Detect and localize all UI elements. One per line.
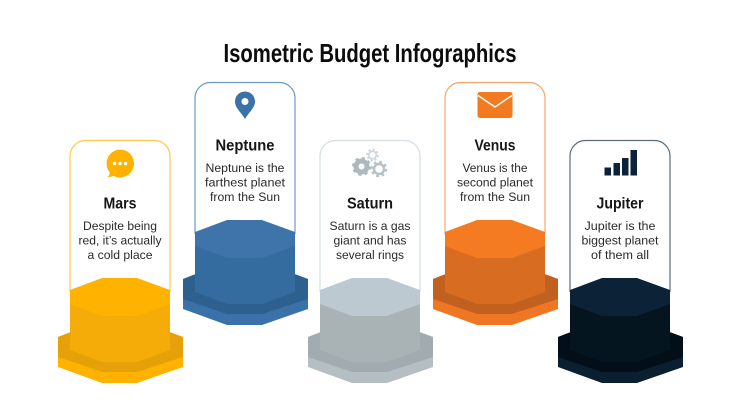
text block: farthest planet — [205, 176, 286, 190]
heading: Jupiter — [596, 196, 644, 212]
title: Isometric Budget Infographics — [224, 38, 516, 68]
text block — [205, 161, 286, 204]
heading: Venus — [474, 138, 516, 154]
card outline — [320, 140, 420, 292]
text block: several rings — [336, 248, 404, 262]
text block: red, it’s actually — [78, 234, 162, 248]
text block: biggest planet — [582, 234, 659, 248]
isometric column — [558, 278, 683, 383]
text block: a cold place — [88, 248, 153, 262]
text block: second planet — [457, 176, 534, 190]
icon: bar chart — [604, 150, 637, 176]
card outline — [570, 140, 670, 292]
isometric column — [433, 220, 558, 325]
card outline — [445, 82, 545, 234]
text block — [457, 161, 534, 204]
panel: Neptune — [183, 82, 308, 325]
isometric column — [308, 278, 433, 383]
panel: Saturn — [308, 140, 433, 383]
icon: map pin — [235, 92, 255, 119]
text block: from the Sun — [460, 190, 530, 204]
panel: Jupiter — [558, 140, 683, 383]
heading: Neptune — [216, 138, 275, 154]
icon: gears — [354, 150, 386, 176]
text block — [330, 219, 410, 262]
text block: giant and has — [334, 234, 406, 248]
heading: Saturn — [347, 196, 393, 212]
text block: of them all — [591, 248, 649, 262]
text block: Despite being — [83, 219, 157, 233]
text block: from the Sun — [210, 190, 280, 204]
text block: Venus is the — [462, 161, 528, 175]
text block — [582, 219, 659, 262]
card outline — [70, 140, 170, 292]
card outline — [195, 82, 295, 234]
text block — [78, 219, 162, 262]
text block: Neptune is the — [206, 161, 285, 175]
text block: Saturn is a gas — [330, 219, 410, 233]
icon: speech bubble — [107, 150, 134, 178]
text block: Jupiter is the — [584, 219, 656, 233]
isometric column — [58, 278, 183, 383]
panel: Venus — [433, 82, 558, 325]
panel: Mars — [58, 140, 183, 383]
isometric column — [183, 220, 308, 325]
icon: envelope — [478, 92, 512, 118]
heading: Mars — [104, 196, 136, 212]
